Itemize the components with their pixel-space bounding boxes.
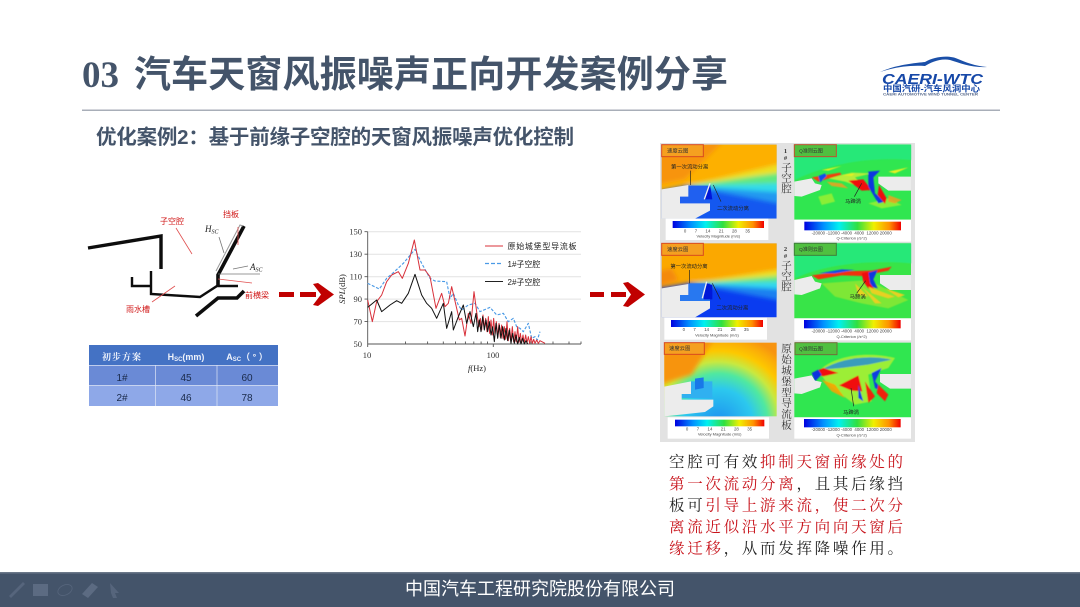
legend line 3 — [485, 280, 503, 282]
baffle plate — [218, 226, 244, 286]
chart axes — [364, 232, 581, 347]
roof section — [88, 236, 161, 269]
Q contour 3: Q准则云图 — [799, 345, 823, 352]
Q legend 1: -20000 -12000 -4000 4000 12000 20000 — [812, 231, 892, 236]
side label 1: 1# 子空腔 — [780, 148, 791, 194]
logo wordmark: CAERI-WTC — [882, 72, 984, 88]
line 1: 空腔可有效抑制天窗前缘处的 — [669, 453, 903, 471]
velocity legend 1: Velocity Magnitude (m/s) — [697, 234, 741, 239]
y axis labels — [349, 226, 362, 349]
Q contour 3: 马蹄涡 — [843, 408, 859, 416]
gutter — [132, 277, 151, 286]
row: cavity 1 — [661, 144, 912, 242]
footer background — [0, 572, 1080, 607]
label baffle: 挡板 — [223, 209, 239, 219]
velocity contour 2 title tag — [662, 243, 703, 255]
legend text 1: 原始城堡型导流板 — [508, 241, 576, 251]
Q legend 1: Q-Criterion (/s^2) — [836, 236, 868, 241]
velocity legend 1: 0 7 14 21 28 35 — [684, 229, 751, 234]
sunroof cavity diagram — [88, 209, 269, 316]
Q contour 3 title tag — [795, 343, 837, 355]
y axis labels: 90 — [354, 294, 362, 304]
Q contour 2: Q准则云图 — [799, 246, 823, 253]
red leader lines — [152, 227, 252, 302]
x axis labels: 100 — [487, 350, 499, 360]
table row 2 — [89, 386, 278, 406]
logo chinese name: 中国汽研-汽车风洞中心 — [883, 84, 981, 94]
label Hsc: H — [205, 224, 212, 234]
velocity contour 1: 速度云图 — [667, 146, 688, 154]
line 2: 第一次流动分离，且其后缘挡 — [669, 475, 903, 493]
table header — [89, 345, 278, 366]
Q legend 2 — [794, 318, 911, 340]
velocity contour 1 — [661, 144, 777, 219]
header text 2: SC — [174, 357, 183, 363]
velocity legend 3 — [668, 417, 769, 439]
Q contour 2 — [794, 243, 911, 318]
line 3: 板可引导上游来流，使二次分 — [669, 496, 903, 514]
label cavity: 子空腔 — [160, 216, 184, 226]
gutter floor — [151, 271, 238, 297]
side label 3: 原始城堡型导流板 — [780, 343, 791, 431]
legend line 2 — [485, 262, 503, 264]
label gutter: 雨水槽 — [126, 304, 150, 314]
y axis title: SPL(dB) — [337, 274, 347, 304]
Q legend 2: -20000 -12000 -4000 4000 12000 20000 — [812, 329, 892, 334]
label Asc: SC — [256, 268, 264, 274]
header text 3: A — [226, 352, 233, 362]
velocity legend 2 — [664, 318, 767, 340]
legend text 3: 2#子空腔 — [508, 277, 540, 287]
logo: CAERI-WTC — [880, 57, 987, 96]
velocity legend 1 — [666, 219, 768, 240]
series: cavity 1 — [368, 249, 540, 340]
legend line 1 — [485, 245, 503, 247]
footer company name: 中国汽车工程研究院股份有限公司 — [405, 579, 675, 599]
velocity contour 1: 二次流动分离 — [717, 204, 749, 212]
velocity contour 2 — [661, 242, 777, 318]
label Hsc: SC — [212, 230, 220, 236]
Q contour 1: 马蹄涡 — [845, 197, 861, 205]
conclusion paragraph — [669, 453, 903, 558]
icon: pointer — [110, 583, 119, 598]
row: cavity 2 — [661, 242, 912, 340]
label Asc: A — [250, 262, 256, 272]
label beam: 前横梁 — [245, 290, 269, 300]
Q legend 1 — [794, 220, 911, 242]
series: original baffle — [368, 240, 545, 343]
title: 汽车天窗风振噪声正向开发案例分享 — [134, 54, 728, 95]
series: cavity 2 — [368, 274, 528, 344]
velocity legend 2: 0 7 14 21 28 35 — [683, 327, 749, 332]
velocity contour 2: 二次流动分离 — [716, 303, 748, 311]
row 2 Asc: 78 — [241, 393, 253, 404]
Q legend 2: Q-Criterion (/s^2) — [836, 334, 868, 339]
row 2 scheme: 2# — [116, 393, 128, 404]
SPL line chart — [337, 226, 581, 373]
row: original baffle — [664, 342, 911, 439]
parameter table — [89, 345, 278, 406]
header text 2: (mm) — [182, 352, 204, 362]
x axis labels: 10 — [363, 350, 371, 360]
Q contour 2 title tag — [794, 243, 836, 255]
side label 2: 2# 子空腔 — [780, 246, 791, 292]
legend text 2: 1#子空腔 — [508, 259, 540, 269]
subheading: 优化案例2：基于前缘子空腔的天窗风振噪声优化控制 — [96, 125, 574, 149]
y axis labels: 70 — [354, 316, 362, 326]
icon: eraser — [82, 583, 98, 598]
velocity contour 2: 速度云图 — [667, 245, 688, 253]
line 5: 缘迁移，从而发挥降噪作用。 — [669, 538, 903, 558]
Q legend 3 — [794, 417, 911, 439]
dimension line Hsc — [216, 225, 243, 271]
chart grid lines — [368, 232, 581, 322]
row 2 Hsc: 46 — [180, 393, 192, 404]
Q contour 1 title tag — [794, 145, 836, 157]
line 4: 离流近似沿水平方向向天窗后 — [669, 518, 903, 536]
velocity contour 2: 第一次流动分离 — [670, 262, 708, 270]
table grid — [89, 365, 278, 406]
logo english name: CAERI AUTOMOTIVE WIND TUNNEL CENTER — [883, 92, 978, 96]
Q contour 1 — [794, 145, 911, 220]
angle line Asc — [218, 237, 260, 274]
header text 3: （ ° ） — [241, 352, 268, 362]
footer bar — [0, 572, 1080, 607]
y axis labels: 130 — [349, 249, 362, 259]
velocity legend 3: 0 7 14 21 28 35 — [686, 426, 753, 431]
CFD results panel — [660, 143, 915, 442]
icon: pen — [9, 582, 25, 598]
velocity contour 3 — [664, 342, 777, 416]
panel background — [660, 143, 915, 442]
velocity contour 3: 速度云图 — [669, 344, 690, 352]
arrow 1 — [279, 283, 334, 306]
header text 1: 初步方案 — [102, 351, 142, 362]
y axis labels: 150 — [349, 226, 362, 236]
arrow 2 — [590, 282, 645, 307]
icon: slide grid — [33, 584, 48, 596]
series plotted in 3x coordinates — [368, 240, 545, 344]
Q contour 2: 马蹄涡 — [850, 293, 866, 301]
velocity legend 2: Velocity Magnitude (m/s) — [695, 332, 739, 337]
title: 03 — [82, 55, 119, 96]
Q legend 3: Q-Criterion (/s^2) — [836, 432, 868, 437]
Q legend 3: -20000 -12000 -4000 4000 12000 20000 — [812, 427, 892, 432]
velocity contour 1 title tag — [662, 145, 703, 157]
header text 3: SC — [233, 357, 242, 363]
y axis labels: 50 — [354, 339, 362, 349]
velocity contour 1: 第一次流动分离 — [671, 163, 708, 171]
icon: lasso — [56, 582, 74, 598]
logo car swoosh — [880, 57, 987, 72]
velocity legend 3: Velocity Magnitude (m/s) — [698, 431, 742, 436]
velocity contour 3 title tag — [664, 343, 704, 354]
x axis labels — [363, 350, 499, 360]
title rule — [82, 110, 1000, 111]
header text 2: H — [168, 352, 174, 362]
footer top edge — [0, 572, 1080, 574]
table row 1 — [89, 366, 278, 386]
y axis labels: 110 — [350, 272, 362, 282]
Q contour 3 — [794, 343, 911, 417]
row 1 scheme: 1# — [116, 373, 128, 384]
row 1 Hsc: 45 — [180, 373, 192, 384]
front cross beam — [196, 291, 244, 316]
Q contour 1: Q准则云图 — [799, 147, 823, 154]
row 1 Asc: 60 — [241, 373, 253, 384]
x axis title: f(Hz) — [468, 363, 486, 373]
